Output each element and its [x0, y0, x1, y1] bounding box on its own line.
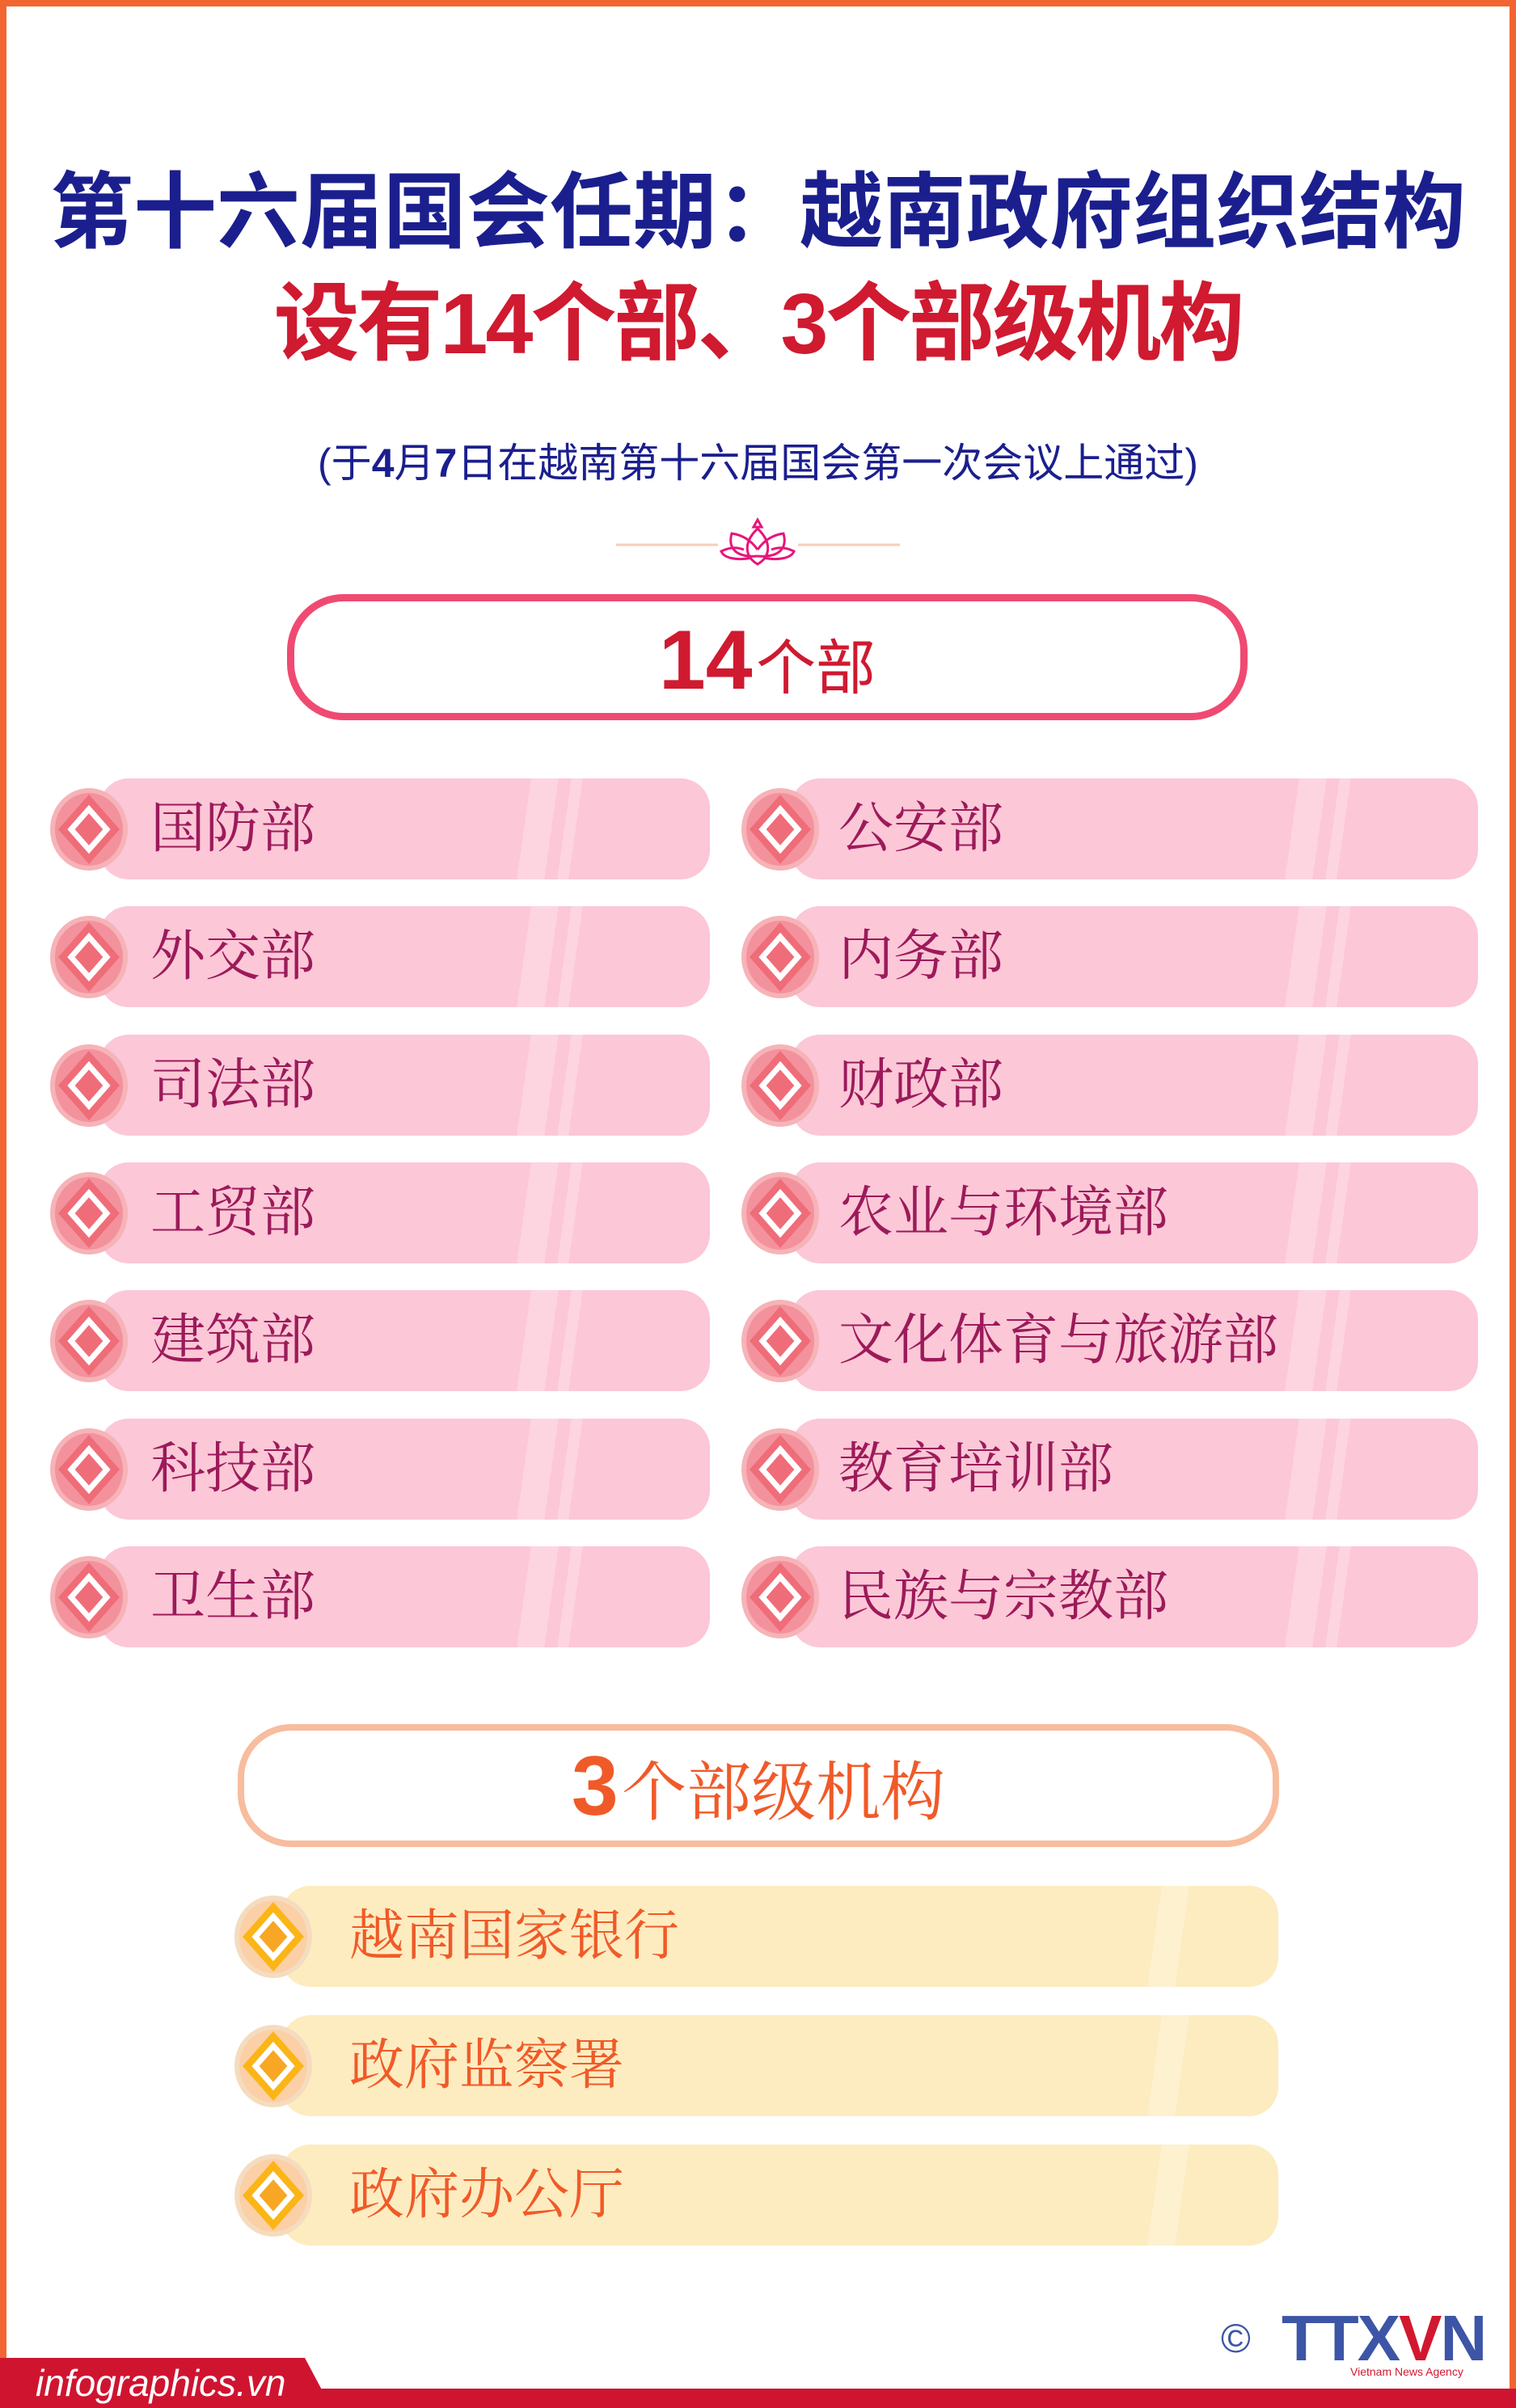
row: 国防部 — [50, 778, 710, 879]
row: 卫生部: 卫生部 — [150, 1566, 315, 1627]
row: 政府办公厅: 政府办公厅 — [349, 2164, 624, 2225]
row: 民族与宗教部: 民族与宗教部 — [838, 1566, 1168, 1627]
row: 文化体育与旅游部 — [741, 1290, 1478, 1391]
row: 农业与环境部 — [741, 1162, 1478, 1263]
row: 文化体育与旅游部: 文化体育与旅游部 — [838, 1309, 1278, 1371]
row: 司法部: 司法部 — [150, 1054, 315, 1115]
ministries list — [50, 778, 1478, 1647]
row: 建筑部: 建筑部 — [150, 1309, 315, 1371]
header box: 3 ministerial-level agencies: 3 个部级机构 — [572, 1740, 945, 1833]
row: 建筑部 — [50, 1290, 710, 1391]
row: 科技部: 科技部 — [150, 1438, 315, 1499]
agencies list — [234, 1886, 1278, 2246]
row: 越南国家银行: 越南国家银行 — [349, 1905, 679, 1967]
row: 国防部: 国防部 — [150, 798, 315, 859]
footer bar — [0, 2389, 1516, 2408]
title line 1: 第十六届国会任期：越南政府组织结构 — [50, 166, 1466, 259]
row: 外交部 — [50, 906, 710, 1007]
row: 民族与宗教部 — [741, 1546, 1478, 1647]
row: 财政部 — [741, 1035, 1478, 1136]
row: 政府监察署: 政府监察署 — [349, 2035, 624, 2096]
row: 越南国家银行 — [234, 1886, 1278, 1987]
header box: 3 ministerial-level agencies — [238, 1724, 1279, 1847]
row: 科技部 — [50, 1419, 710, 1520]
row: 工贸部: 工贸部 — [150, 1182, 315, 1243]
row: 工贸部 — [50, 1162, 710, 1263]
logo: TTXVN: Vietnam News Agency — [1350, 2365, 1463, 2378]
logo: TTXVN: © — [1221, 2316, 1251, 2361]
logo: TTXVN: TTXVN — [1282, 2302, 1485, 2374]
row: 政府监察署 — [234, 2015, 1278, 2116]
row: 内务部: 内务部 — [838, 926, 1003, 987]
row: 教育培训部: 教育培训部 — [838, 1438, 1113, 1499]
row: 卫生部 — [50, 1546, 710, 1647]
row: 政府办公厅 — [234, 2144, 1278, 2246]
row: 内务部 — [741, 906, 1478, 1007]
footer tab: infographics.vn: infographics.vn — [36, 2362, 285, 2404]
header box: 14 ministries — [287, 594, 1248, 720]
row: 公安部 — [741, 778, 1478, 879]
row: 教育培训部 — [741, 1419, 1478, 1520]
subtitle: (于4月7日在越南第十六届国会第一次会议上通过) — [318, 441, 1198, 486]
row: 公安部: 公安部 — [838, 798, 1003, 859]
row: 外交部: 外交部 — [150, 926, 315, 987]
row: 司法部 — [50, 1035, 710, 1136]
title line 2: 设有14个部、3个部级机构 — [274, 276, 1242, 372]
row: 财政部: 财政部 — [838, 1054, 1003, 1115]
row: 农业与环境部: 农业与环境部 — [838, 1182, 1168, 1243]
lotus ornament — [616, 517, 900, 566]
header box: 14 ministries: 14 个部 — [659, 614, 876, 707]
